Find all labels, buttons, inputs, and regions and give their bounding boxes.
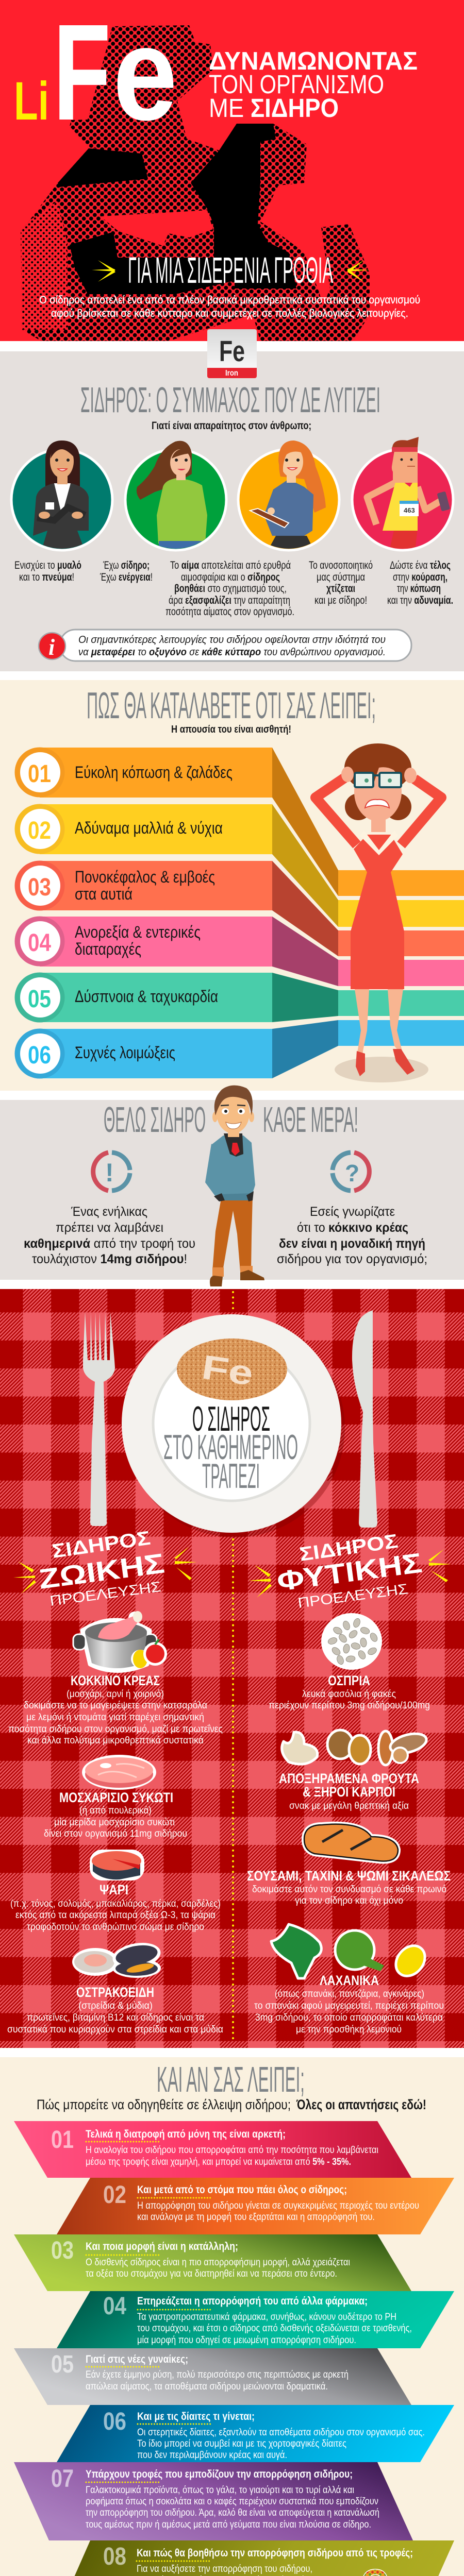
banner 03	[14, 2234, 411, 2291]
banner 05: Εάν έχετε έμμηνο ρύση, πολύ περισσότερο στις περιπτώσεις με αρκετή	[86, 2369, 349, 2380]
icon: fork	[83, 1312, 115, 1526]
icon: Fe element card	[207, 329, 257, 378]
heading: plant source: ΣΙΔΗΡΟΣ	[298, 1531, 399, 1566]
logo: LiFe: e	[113, 0, 177, 148]
text: adult daily need: Ένας ενήλικας	[71, 1205, 147, 1219]
icon: vegetables	[271, 1924, 431, 1982]
symptom 02	[14, 804, 464, 927]
lentils Fe	[177, 1338, 287, 1400]
text: fish	[10, 1882, 221, 1933]
banner 07	[14, 2462, 413, 2540]
text: sesame and rye: δοκιμάστε αυτόν τον συνδυασμό σε κάθε πρωινό	[252, 1884, 446, 1895]
subheading: Γιατί είναι απαραίτητος στον άνθρωπο;	[152, 420, 311, 432]
heading: animal source	[37, 1528, 166, 1609]
icon: shellfish	[72, 1939, 162, 1978]
banner 07: Υπάρχουν τροφές που εμποδίζουν την απορρόφηση σιδήρου;	[86, 2468, 353, 2480]
title: ΜΕ ΣΙΔΗΡΟ	[209, 93, 339, 123]
banner 02	[57, 2178, 454, 2234]
symptom 04	[14, 916, 464, 986]
text: blood: ποσότητα αίματος στον οργανισμό.	[165, 606, 294, 618]
heading: animal source: ΖΩΙΚΗΣ	[37, 1548, 166, 1595]
title: ΔΥΝΑΜΩΝΟΝΤΑΣ	[209, 47, 418, 75]
heading: plant source: ΦΥΤΙΚΗΣ	[275, 1547, 424, 1597]
logo: LiFe: Li	[14, 71, 49, 131]
text: red meat: με λεμόνι ή ντομάτα γιατί παρέχει σημαντική	[26, 1712, 204, 1723]
text: fish: (π.χ. τόνος, σολομός, μπακαλιάρος, πέρκα, σαρδέλες)	[10, 1899, 221, 1909]
text: fatigue: Δώστε ένα τέλος	[390, 560, 451, 571]
intro text	[39, 294, 420, 319]
text: adult daily need: καθημερινά από την τροφή του	[24, 1236, 195, 1251]
text: blood	[165, 560, 294, 618]
banner 05	[14, 2348, 411, 2405]
banner 04: 04	[103, 2293, 126, 2320]
text: fish: τροφοδοτούν το ανθρώπινο σώμα με σίδηρο	[27, 1922, 204, 1933]
text: immune system: χτίζεται	[326, 583, 355, 595]
subheading: Πώς μπορείτε να οδηγηθείτε σε έλλειψη σιδήρου;	[37, 2097, 291, 2112]
icon: yellow sparks right	[347, 260, 370, 282]
white gap above table	[0, 1280, 464, 1289]
banner 04: Επηρεάζεται η απορρόφησή του από άλλα φάρμακα;	[137, 2295, 368, 2307]
banner 04: του στομάχου, και έτσι ο σίδηρος από δισθενής οξειδώνεται σε τρισθενής,	[137, 2323, 412, 2334]
banner 06: Το ίδιο μπορεί να συμβεί και με τις χορτοφαγικές δίαιτες	[137, 2438, 346, 2449]
lentils Fe: Fe	[200, 1348, 256, 1393]
panel: hero	[0, 0, 464, 341]
text: shellfish: ΟΣΤΡΑΚΟΕΙΔΗ	[76, 1985, 154, 2000]
text: adult daily need: τουλάχιστον 14mg σιδήρου!	[32, 1252, 187, 1266]
icon: yellow sparks left	[92, 260, 115, 282]
text: sesame and rye: για τον σίδηρο και όχι μόνο	[295, 1895, 403, 1906]
banner 01: 01	[51, 2126, 74, 2154]
icon: business woman	[11, 440, 112, 551]
text: red meat: δοκιμάστε να το μαγειρέψετε στην κατσαρόλα	[24, 1700, 207, 1711]
symptom 03: Πονοκέφαλος & εμβοές	[75, 868, 215, 886]
icon: info	[39, 633, 65, 660]
text: dried fruit and nuts	[279, 1771, 419, 1811]
illustration: plate: Ο ΣΙΔΗΡΟΣ	[192, 1399, 270, 1438]
symptom 03	[14, 860, 464, 956]
white gap above table top edge	[0, 1282, 1, 1283]
icon: white beans	[321, 1613, 382, 1670]
text: dried fruit and nuts: & ΞΗΡΟΙ ΚΑΡΠΟΙ	[303, 1784, 395, 1800]
symptom 03: 03	[28, 874, 51, 901]
banner 08: 08	[103, 2543, 126, 2570]
intro text: Ο σίδηρος αποτελεί ένα από τα πλέον βασικά μικροθρεπτικά συστατικά του οργανισμού	[39, 294, 420, 306]
icon: sparks left title	[13, 1547, 197, 1594]
text: blood: Το αίμα αποτελείται από ερυθρά	[170, 560, 291, 571]
banner 01: Τελικά η διατροφή από μόνη της είναι αρκετή;	[86, 2128, 286, 2140]
text: vegetables: ΛΑΧΑΝΙΚΑ	[320, 1973, 379, 1988]
text: red meat	[277, 1205, 427, 1266]
white gap below table	[0, 2048, 464, 2057]
heading: plant source	[275, 1531, 424, 1611]
text: immune system: και με σίδηρο!	[314, 595, 367, 606]
symptom 05: Δύσπνοια & ταχυκαρδία	[75, 987, 218, 1006]
panel: deficiency causes	[0, 2057, 464, 2576]
banner 07: την απορρόφηση του σιδήρου. Άρα, καλό θα είναι να αποφεύγεται η κατανάλωσή	[86, 2507, 379, 2518]
symptom 05: 05	[28, 986, 51, 1013]
text: energy: Έχω ενέργεια!	[100, 571, 153, 583]
heading: ΘΕΛΩ ΣΙΔΗΡΟ	[104, 1099, 206, 1140]
text: mind and spirit: και το πνεύμα!	[19, 571, 74, 583]
icon: runner: 463	[404, 506, 415, 514]
text: liver	[44, 1790, 187, 1839]
banner 03: τα οξέα του στομάχου για να διατηρηθεί και να περάσει στο έντερο.	[86, 2268, 337, 2279]
symptom 02: Αδύναμα μαλλιά & νύχια	[75, 819, 223, 837]
banner 07: τους αμέσως πριν ή αμέσως μετά από γεύματα που είναι πλούσια σε σίδηρο.	[86, 2519, 371, 2530]
text: liver: ΜΟΣΧΑΡΙΣΙΟ ΣΥΚΩΤΙ	[59, 1790, 173, 1805]
text: liver: μία μερίδα μοσχαρίσιο συκώτι	[54, 1817, 175, 1828]
text: dried fruit and nuts: σνακ με μεγάλη θρεπτική αξία	[289, 1801, 409, 1811]
banner 04: μία μορφή που οδηγεί σε μειωμένη απορρόφηση σιδήρου.	[137, 2335, 356, 2346]
icon: bread	[304, 1824, 398, 1861]
banner 06: Οι στερητικές δίαιτες, εξαντλούν τα αποθέματα σιδήρου στον οργανισμό σας.	[137, 2427, 425, 2438]
banner 04	[57, 2291, 454, 2348]
icon: woman with green top	[125, 441, 226, 551]
banner 08: Και πώς θα βοηθήσω την απορρόφηση σιδήρου από τις τροφές;	[137, 2547, 413, 2559]
icon: question ring: ?	[345, 1160, 359, 1187]
banner 04: Τα γαστροπροστατευτικά φάρμακα, συνήθως, κάνουν ουδέτερο το PH	[137, 2312, 396, 2323]
icon: steak	[82, 1755, 156, 1790]
callout: Οι σημαντικότερες λειτουργίες του σιδήρου οφείλονται στην ιδιότητά του	[78, 634, 386, 646]
text: fish: εκτός από τα ακόρεστα λιπαρά οξέα Ω-3, τα ψάρια	[15, 1910, 216, 1921]
icon: vitamin letters	[361, 2561, 420, 2576]
banner 01	[14, 2121, 411, 2178]
title	[209, 47, 418, 123]
banner 05: απώλεια αίματος, τα αποθέματα σιδήρου μειώνονται δραματικά.	[86, 2381, 328, 2392]
text: immune system: μας σύστημα	[317, 571, 365, 583]
text: adult daily need	[24, 1205, 195, 1266]
text: red meat: δεν είναι η μοναδική πηγή	[279, 1236, 425, 1251]
white gap above ally section	[0, 341, 464, 351]
symptom 05	[14, 973, 464, 1022]
text: fatigue	[387, 560, 453, 606]
text: vegetables: το σπανάκι αφού μαγειρευτεί, περιέχει περίπου	[254, 2001, 444, 2011]
text: red meat	[8, 1673, 223, 1746]
callout	[39, 630, 411, 661]
icon: woman with notebook	[238, 440, 339, 551]
dotted divider	[232, 1292, 234, 2043]
subheading: Όλες οι απαντήσεις εδώ!	[296, 2097, 426, 2112]
symptom 06: Συχνές λοιμώξεις	[75, 1043, 175, 1062]
icon: fish	[90, 1850, 144, 1880]
text: energy	[100, 560, 153, 583]
panel: table	[0, 1289, 464, 2048]
text: vegetables: (όπως σπανάκι, παντζάρια, αγκινάρες)	[275, 1989, 424, 1999]
panel: daily iron	[0, 1099, 464, 1280]
banner 02: Η απορρόφηση του σιδήρου γίνεται σε συγκεκριμένες περιοχές του εντέρου	[137, 2200, 419, 2211]
icon: question ring	[333, 1153, 369, 1191]
banner 01: Η αναλογία του σιδήρου που απορροφάται από την ποσότητα που λαμβάνεται	[86, 2145, 378, 2156]
text: energy: Έχω σίδηρο;	[103, 560, 150, 571]
text: legumes: λευκά φασόλια ή φακές	[302, 1689, 396, 1700]
text: red meat: και άλλα πολύτιμα μικροθρεπτικά συστατικά	[27, 1735, 204, 1746]
illustration: plate	[122, 1314, 345, 1537]
icon: knife	[352, 1310, 377, 1528]
text: fatigue: στην κούραση,	[393, 571, 448, 583]
icon: Fe element card: Iron	[225, 369, 238, 378]
text: red meat: ποσότητα σιδήρου στον οργανισμό, μαζί με πρωτεΐνες	[8, 1724, 223, 1735]
text: adult daily need: πρέπει να λαμβάνει	[56, 1221, 163, 1235]
banner 07: ροφήματα όπως η σοκολάτα και ο καφές περιέχουν συστατικά που εμποδίζουν	[86, 2496, 378, 2507]
illustration: plate: ΤΡΑΠΕΖΙ	[202, 1456, 260, 1496]
banner 06: Και με τις δίαιτες τι γίνεται;	[137, 2411, 255, 2422]
white gap below ally section	[0, 671, 464, 680]
icon: nuts	[282, 1730, 428, 1765]
illustration: daily iron man	[205, 1086, 264, 1286]
symptom 02: 02	[28, 817, 51, 844]
text: red meat: ΚΟΚΚΙΝΟ ΚΡΕΑΣ	[71, 1673, 160, 1688]
banner 02: Και μετά από το στόμα που πάει όλος ο σίδηρος;	[137, 2184, 347, 2196]
subheading: Η απουσία του είναι αισθητή!	[171, 724, 291, 735]
panel: symptoms	[0, 680, 464, 1091]
icon: Fe element card: Fe	[219, 335, 245, 368]
callout: να μεταφέρει το οξυγόνο σε κάθε κύτταρο του ανθρώπινου οργανισμού.	[78, 647, 386, 658]
text: vegetables: με την προσθήκη λεμονιού	[296, 2024, 402, 2035]
banner 08: Για να αυξήσετε την απορρόφηση του σιδήρου,	[137, 2564, 312, 2574]
text: red meat: ότι το κόκκινο κρέας	[297, 1221, 408, 1235]
text: shellfish	[7, 1985, 223, 2035]
banner 05: Γιατί στις νέες γυναίκες;	[86, 2353, 188, 2365]
text: sesame and rye	[247, 1868, 451, 1906]
icon: info: i	[48, 635, 55, 660]
text: legumes: περιέχουν περίπου 3mg σιδήρου/100mg	[269, 1700, 430, 1711]
banner 05: 05	[51, 2351, 74, 2378]
symptom 04: 04	[28, 929, 51, 957]
banner 03: Και ποια μορφή είναι η κατάλληλη;	[86, 2241, 238, 2252]
text: immune system: Το ανοσοποιητικό	[309, 560, 373, 571]
title: ΤΟΝ ΟΡΓΑΝΙΣΜΟ	[209, 70, 384, 99]
banner 08	[57, 2540, 454, 2576]
text: fish: ΨΑΡΙ	[100, 1882, 128, 1897]
text: fatigue: την κόπωση	[397, 583, 441, 595]
symptom 01: 01	[28, 760, 51, 788]
banner 01: μέσω της τροφής είναι χαμηλή, και μπορεί να κυμαίνεται από 5% - 35%.	[86, 2157, 351, 2167]
text: shellfish: (στρείδια & μύδια)	[78, 2001, 153, 2011]
symptom 04: διαταραχές	[75, 940, 141, 958]
icon: runner	[352, 437, 453, 551]
icon: exclamation ring: !	[105, 1158, 114, 1187]
text: fatigue: και την αδυναμία.	[387, 595, 453, 606]
symptom 03: στα αυτιά	[75, 885, 132, 903]
white gap above daily iron	[0, 1091, 464, 1100]
banner 03: Ο δισθενής σίδηρος είναι η πιο απορροφήσιμη μορφή, αλλά χρειάζεται	[86, 2257, 350, 2268]
illustration: worried woman	[316, 743, 441, 1082]
banner 07: Γαλακτοκομικά προϊόντα, όπως το γάλα, το γιαούρτι και το τυρί αλλά και	[86, 2485, 354, 2496]
intro text: αφού βρίσκεται σε κάθε κύτταρο και συμμετέχει σε πολλές βιολογικές λειτουργίες.	[51, 308, 408, 319]
panel: ally section	[0, 329, 464, 671]
symptom 01: Εύκολη κόπωση & ζαλάδες	[75, 763, 233, 782]
logo: LiFe	[14, 0, 177, 149]
text: blood: βοηθάει στο σχηματισμό τους,	[174, 583, 287, 595]
symptom 04: Ανορεξία & εντερικές	[75, 923, 201, 941]
text: legumes: ΟΣΠΡΙΑ	[328, 1673, 370, 1688]
text: liver: (ή από πουλερικά)	[79, 1805, 152, 1816]
halftone fist illustration	[21, 25, 370, 341]
text: blood: άρα εξασφαλίζει την απαραίτητη	[169, 595, 290, 606]
text: immune system	[309, 560, 373, 606]
text: red meat: σιδήρου για τον οργανισμό;	[277, 1252, 427, 1266]
text: vegetables	[254, 1973, 444, 2035]
text: legumes	[269, 1673, 430, 1711]
text: liver: δίνει στον οργανισμό 11mg σιδήρου	[44, 1828, 187, 1839]
icon: sparks right title	[248, 1549, 451, 1598]
text: vegetables: 3mg σιδήρου, το οποίο απορροφάται καλύτερα	[255, 2012, 443, 2023]
text: mind and spirit: Ενισχύει το μυαλό	[14, 560, 81, 571]
text: dried fruit and nuts: ΑΠΟΞΗΡΑΜΕΝΑ ΦΡΟΥΤΑ	[279, 1771, 419, 1786]
banner 03: 03	[51, 2237, 74, 2264]
text: blood: αιμοσφαίρια και ο σίδηρος	[181, 571, 280, 583]
banner 02: 02	[103, 2181, 126, 2209]
banner 07: 07	[51, 2465, 74, 2493]
banner 02: και ανάλογα με τη μορφή του εξαρτάται και η απορρόφησή του.	[137, 2212, 375, 2223]
banner 06: 06	[103, 2408, 126, 2435]
text: shellfish: πρωτεΐνες, βιταμίνη Β12 και σίδηρος είναι τα	[27, 2012, 204, 2023]
banner 06	[57, 2405, 454, 2462]
text: red meat: Εσείς γνωρίζατε	[310, 1205, 395, 1219]
text: shellfish: συστατικά που κυριαρχούν στα στρείδια και στα μύδια	[7, 2024, 223, 2035]
heading: animal source: ΠΡΟΕΛΕΥΣΗΣ	[49, 1579, 162, 1609]
icon: exclamation ring	[93, 1153, 130, 1191]
icon: pot with meat	[73, 1611, 167, 1670]
text: red meat: (μοσχάρι, αρνί ή χοιρινό)	[67, 1689, 164, 1700]
text: mind and spirit	[14, 560, 81, 583]
symptom 01	[14, 747, 464, 896]
symptom 06	[14, 1020, 464, 1079]
heading: plant source: ΠΡΟΕΛΕΥΣΗΣ	[297, 1581, 409, 1611]
heading: animal source: ΣΙΔΗΡΟΣ	[51, 1528, 152, 1563]
symptom 06: 06	[28, 1042, 51, 1069]
banner 06: που δεν περιλαμβάνουν κρέας και αυγά.	[137, 2450, 287, 2461]
logo: LiFe: F	[53, 0, 111, 149]
